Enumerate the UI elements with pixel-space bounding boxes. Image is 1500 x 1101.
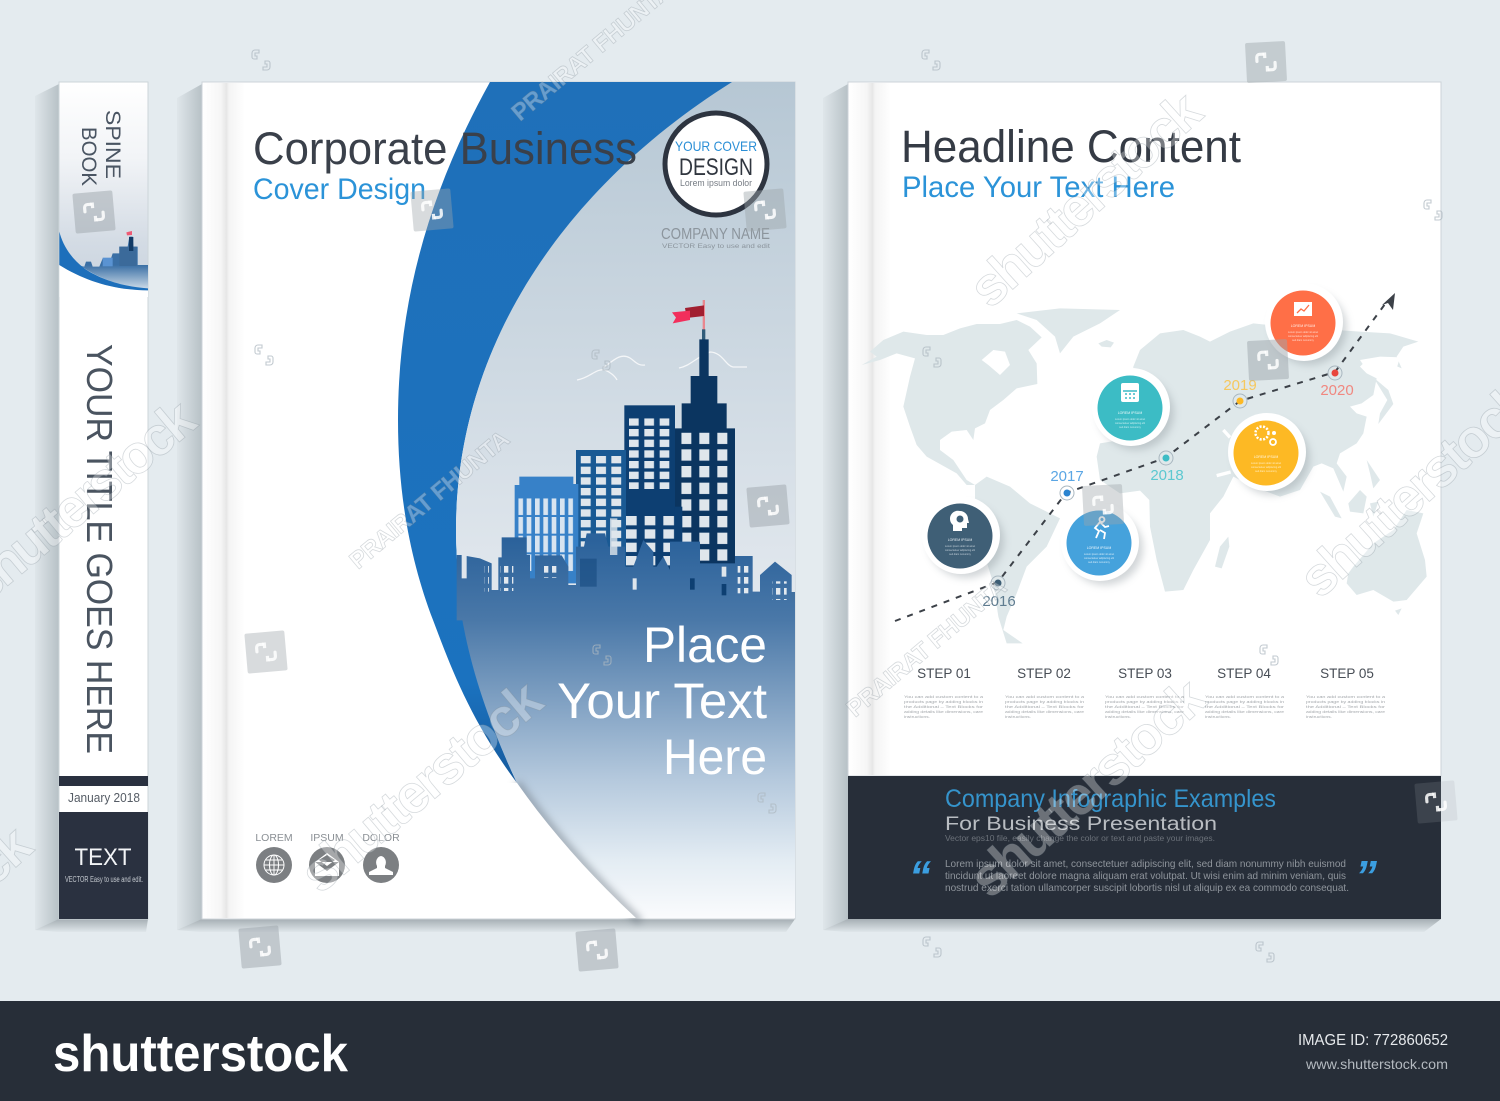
circle: step 5: sed diam nonummy bbox=[1292, 339, 1315, 342]
step 1 body: the Additional – Text Blocks for bbox=[904, 704, 984, 709]
panel: front cover bbox=[177, 82, 795, 932]
step 2 body: adding details like dimensions, care bbox=[1005, 709, 1085, 714]
spine label: SPINE bbox=[101, 110, 124, 179]
back bottom shadow bbox=[823, 919, 1441, 932]
subheadline: Place Your Text Here bbox=[902, 171, 1175, 204]
cover crease bbox=[203, 83, 245, 918]
lower blue fade bbox=[458, 592, 795, 918]
panel: book spine bbox=[35, 82, 148, 932]
spine swoosh and mini skyline bbox=[59, 231, 148, 297]
step 1 body: products page by adding blocks in bbox=[904, 699, 983, 704]
back left shadow bbox=[823, 84, 848, 930]
step 2 body: instructions. bbox=[1005, 714, 1031, 719]
icon labels bbox=[255, 832, 400, 844]
circle: step 4: Lorem ipsum dolor sit amet bbox=[1251, 462, 1281, 465]
image id: IMAGE ID: 772860652 bbox=[1298, 1032, 1448, 1049]
circle: step 4: sed diam nonummy bbox=[1255, 470, 1278, 473]
step 2 body: products page by adding blocks in bbox=[1005, 699, 1084, 704]
mini flag bbox=[126, 231, 132, 235]
world map bbox=[862, 308, 1427, 643]
footer bar bbox=[0, 1001, 1500, 1101]
swoosh bbox=[59, 232, 148, 290]
circle: step 3: consectetuer adipiscing elit bbox=[1115, 422, 1145, 425]
office block mid bbox=[576, 450, 626, 583]
timeline year labels bbox=[982, 377, 1354, 610]
circle: step 1 bbox=[922, 496, 1004, 578]
step headings: STEP 03 bbox=[1118, 666, 1172, 681]
circle: step 3: LOREM IPSUM bbox=[1118, 411, 1142, 415]
step 4 body: instructions. bbox=[1205, 714, 1231, 719]
circle: step 4 bbox=[1228, 413, 1310, 495]
timeline year labels: 2018 bbox=[1150, 467, 1184, 484]
watermark text: PRAIRAT FHUNTA bbox=[842, 573, 1012, 723]
icon: globe bbox=[256, 847, 292, 883]
watermark text: PRAIRAT FHUNTA bbox=[345, 425, 515, 575]
spine bottom shadow bbox=[35, 919, 148, 932]
watermark text: shutterstock bbox=[289, 668, 554, 904]
spine label: BOOK bbox=[77, 127, 100, 186]
circle: step 2 bbox=[1061, 503, 1143, 585]
city skyline bbox=[457, 300, 795, 620]
badge: your cover design bbox=[665, 113, 767, 215]
circle: step 2: Lorem ipsum dolor sit amet bbox=[1084, 553, 1114, 556]
panel: back cover bbox=[823, 82, 1441, 932]
spine label bbox=[77, 110, 124, 186]
step 5 body: products page by adding blocks in bbox=[1306, 699, 1385, 704]
circle: step 4: LOREM IPSUM bbox=[1254, 455, 1278, 459]
company tagline: VECTOR Easy to use and edit bbox=[662, 243, 770, 250]
step 1 body: You can add custom content to a bbox=[904, 694, 984, 699]
step 5 body: adding details like dimensions, care bbox=[1306, 709, 1386, 714]
step 1 body bbox=[904, 694, 984, 719]
cover left shadow bbox=[177, 84, 202, 930]
icon: envelope bbox=[309, 847, 345, 883]
step 5 body bbox=[1306, 694, 1386, 719]
shutterstock logo: shutterstock bbox=[53, 1025, 348, 1083]
eurasia africa australia bbox=[1097, 323, 1427, 615]
step 3 body: You can add custom content to a bbox=[1105, 694, 1185, 699]
circle: step 2: sed diam nonummy bbox=[1088, 561, 1111, 564]
step 4 body: products page by adding blocks in bbox=[1205, 699, 1284, 704]
timeline year labels: 2019 bbox=[1223, 377, 1257, 394]
footer band lorem: nostrud exerci tation ullamcorper suscipit lobortis nisl ut aliquip ex ea commodo consequat. bbox=[945, 882, 1349, 894]
office block dark bbox=[624, 405, 682, 577]
spine left shadow bbox=[35, 84, 59, 930]
circle: step 3: Lorem ipsum dolor sit amet bbox=[1115, 418, 1145, 421]
spine body bbox=[59, 82, 148, 919]
timeline year labels: 2017 bbox=[1050, 468, 1084, 485]
glass block bbox=[515, 477, 578, 583]
timeline dashed arrow bbox=[895, 293, 1395, 621]
back crease bbox=[849, 83, 891, 775]
company name: COMPANY NAME bbox=[661, 226, 770, 243]
step 4 body bbox=[1205, 694, 1285, 719]
icon labels: IPSUM bbox=[310, 832, 344, 844]
footer background bbox=[0, 1001, 1500, 1101]
circle: step 1: consectetuer adipiscing elit bbox=[945, 549, 975, 552]
step headings: STEP 02 bbox=[1017, 666, 1071, 681]
circle: step 5: LOREM IPSUM bbox=[1291, 324, 1315, 328]
circle: step 4: consectetuer adipiscing elit bbox=[1251, 466, 1281, 469]
footer band lorem bbox=[945, 858, 1349, 894]
step headings: STEP 04 bbox=[1217, 666, 1271, 681]
place your text bbox=[557, 617, 767, 785]
footer band lorem: tincidunt ut laoreet dolore magna aliquam erat volutpat. Ut wisi enim ad minim veniam, quis bbox=[945, 870, 1346, 882]
mini tower bbox=[129, 237, 133, 251]
circle: step 2: LOREM IPSUM bbox=[1087, 546, 1111, 550]
timeline year labels: 2016 bbox=[982, 593, 1016, 610]
circle: step 1: LOREM IPSUM bbox=[948, 538, 972, 542]
date label: January 2018 bbox=[68, 791, 140, 805]
circle: step 3 bbox=[1092, 368, 1174, 450]
watermark text: shutterstock bbox=[958, 80, 1214, 319]
footer band note: Vector eps10 file, easily change the color or text and paste your images. bbox=[945, 834, 1215, 843]
circle: step 1: sed diam nonummy bbox=[949, 553, 972, 556]
white page curve bbox=[420, 783, 636, 918]
step headings: STEP 01 bbox=[917, 666, 971, 681]
step 2 body: You can add custom content to a bbox=[1005, 694, 1085, 699]
icon: person bbox=[363, 847, 399, 883]
tallest tower bbox=[675, 339, 735, 578]
quote close: ” bbox=[1355, 852, 1377, 901]
curve shadow bbox=[517, 783, 640, 922]
step 2 body: the Additional – Text Blocks for bbox=[1005, 704, 1085, 709]
headline: Headline Content bbox=[901, 121, 1241, 172]
step 5 body: the Additional – Text Blocks for bbox=[1306, 704, 1386, 709]
step headings: STEP 05 bbox=[1320, 666, 1374, 681]
step 3 body: the Additional – Text Blocks for bbox=[1105, 704, 1185, 709]
place your text: Place bbox=[643, 617, 767, 673]
step 5 body: instructions. bbox=[1306, 714, 1332, 719]
circle: step 5: consectetuer adipiscing elit bbox=[1288, 335, 1318, 338]
foreground houses bbox=[457, 518, 795, 620]
mini glass block bbox=[103, 258, 113, 266]
blue swoosh band bbox=[398, 82, 735, 783]
americas and greenland bbox=[862, 308, 1120, 643]
timeline markers bbox=[991, 366, 1342, 590]
spine top gradient bbox=[60, 82, 148, 296]
mini skyline ground bbox=[81, 237, 148, 289]
timeline year labels: 2020 bbox=[1320, 382, 1354, 399]
white below swoosh bbox=[59, 265, 148, 297]
place your text: Here bbox=[663, 729, 767, 785]
step 4 body: adding details like dimensions, care bbox=[1205, 709, 1285, 714]
site url: www.shutterstock.com bbox=[1305, 1056, 1448, 1072]
circle: step 5 bbox=[1265, 283, 1347, 365]
circle: step 5: Lorem ipsum dolor sit amet bbox=[1288, 331, 1318, 334]
step 1 body: adding details like dimensions, care bbox=[904, 709, 984, 714]
step 1 body: instructions. bbox=[904, 714, 930, 719]
dark footer band bbox=[848, 776, 1441, 919]
step 2 body bbox=[1005, 694, 1085, 719]
icon labels: LOREM bbox=[255, 832, 293, 844]
spine dark footer bbox=[59, 812, 148, 919]
mini tall block bbox=[119, 247, 137, 266]
flag bbox=[672, 300, 705, 340]
step 3 body: adding details like dimensions, care bbox=[1105, 709, 1185, 714]
spine title: YOUR TITLE GOES HERE bbox=[79, 344, 120, 754]
watermark grey squares bbox=[72, 41, 1458, 972]
step 5 body: You can add custom content to a bbox=[1306, 694, 1386, 699]
spine dark bar bbox=[59, 776, 148, 786]
footer text: TEXT bbox=[74, 844, 132, 871]
footer small text: VECTOR Easy to use and edit. bbox=[65, 875, 143, 884]
place your text: Your Text bbox=[557, 673, 767, 729]
quote open: “ bbox=[909, 852, 931, 901]
footer band subtitle: For Business Presentation bbox=[945, 814, 1217, 835]
badge: your cover design: Lorem ipsum dolor bbox=[680, 178, 752, 188]
icon labels: DOLOR bbox=[362, 832, 400, 844]
step headings bbox=[917, 666, 1374, 681]
badge: your cover design: DESIGN bbox=[679, 154, 753, 181]
cover subtitle: Cover Design bbox=[253, 173, 426, 206]
step 4 body: the Additional – Text Blocks for bbox=[1205, 704, 1285, 709]
step 3 body: products page by adding blocks in bbox=[1105, 699, 1184, 704]
footer band title: Company Infographic Examples bbox=[945, 785, 1276, 813]
light grey panel bbox=[456, 82, 795, 918]
cover bottom shadow bbox=[177, 919, 795, 932]
birds bbox=[577, 352, 747, 380]
step 3 body bbox=[1105, 694, 1185, 719]
footer band lorem: Lorem ipsum dolor sit amet, consectetuer adipiscing elit, sed diam nonummy nibh euismod bbox=[945, 858, 1346, 870]
badge: your cover design: YOUR COVER bbox=[675, 138, 757, 154]
circle: step 3: sed diam nonummy bbox=[1119, 426, 1142, 429]
step 3 body: instructions. bbox=[1105, 714, 1131, 719]
circle: step 2: consectetuer adipiscing elit bbox=[1084, 557, 1114, 560]
watermark text: shutterstock bbox=[958, 666, 1218, 909]
step 4 body: You can add custom content to a bbox=[1205, 694, 1285, 699]
circle: step 1: Lorem ipsum dolor sit amet bbox=[945, 545, 975, 548]
cover title: Corporate Business bbox=[253, 123, 637, 174]
cover sheet bbox=[202, 82, 795, 919]
back sheet bbox=[848, 82, 1441, 776]
